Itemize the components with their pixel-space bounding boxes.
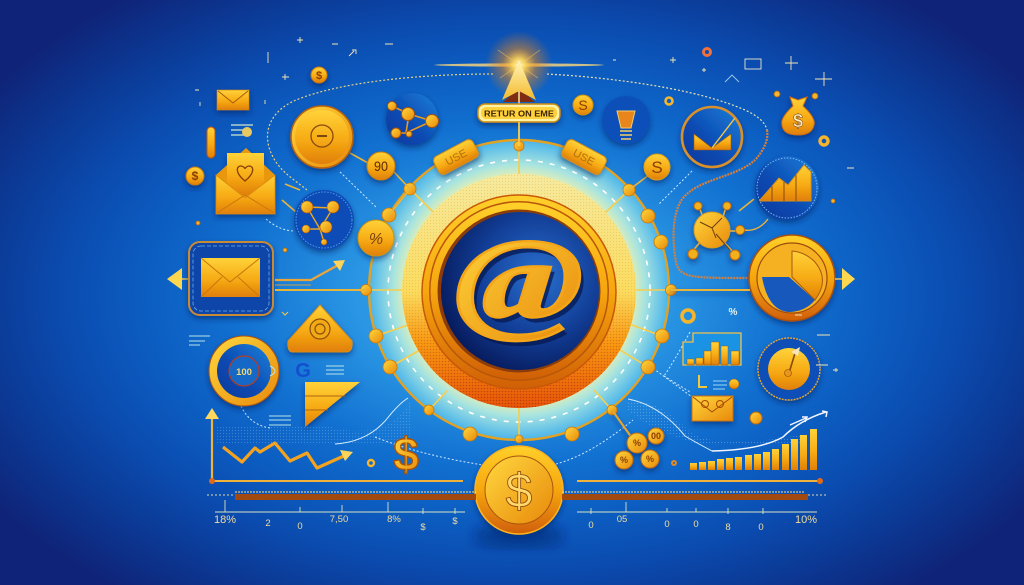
pill [207, 127, 215, 158]
label: return on email [478, 104, 560, 122]
orbit nodes [360, 141, 676, 443]
coin: dollar right: S [651, 158, 663, 177]
coin: percent glyphs [358, 220, 394, 256]
scale right: 0 [693, 519, 699, 530]
dial: 100: 100 [236, 367, 252, 378]
coin: dollar right [644, 154, 670, 180]
dashed inner orbit [388, 160, 650, 422]
coin: 90 [367, 152, 395, 180]
small rings [196, 48, 835, 466]
arrow tag left [167, 268, 188, 290]
money bag: $ [793, 111, 803, 131]
network badge top [386, 93, 438, 145]
scale left: $ [452, 516, 458, 527]
scale right: 0 [758, 522, 764, 533]
dot mesh waves [217, 402, 410, 445]
icon: envelope with heart [216, 148, 275, 214]
at sign: @ [454, 215, 584, 344]
baseline bar right [562, 492, 826, 500]
USE badge left: USE [444, 147, 469, 168]
orange envelope [692, 396, 733, 421]
dial: 100 [209, 336, 279, 406]
chart badge [755, 156, 819, 220]
scale left: 2 [265, 518, 271, 529]
pie chart dial [671, 235, 835, 321]
decorative sparks [195, 37, 854, 372]
percent coins: % [620, 455, 628, 465]
email box [189, 242, 273, 315]
gold bezel [422, 195, 616, 389]
gold ledger triangle [305, 382, 360, 427]
chevron [282, 312, 288, 315]
bar chart right [690, 429, 817, 470]
knob dial [758, 338, 820, 400]
money bag [782, 97, 814, 135]
scale right: 05 [617, 514, 627, 525]
big gold button [291, 106, 353, 168]
percent label: % [729, 307, 738, 318]
outer orbit ring [369, 140, 669, 440]
check and list [699, 375, 739, 389]
blue glyph: G [295, 360, 311, 382]
halo ring [402, 174, 636, 408]
coin: dollar top left [311, 67, 327, 83]
coin: dollar right top [573, 95, 593, 115]
percent coins: % [646, 454, 654, 464]
small list icon [231, 125, 253, 137]
dotted connector curves [241, 74, 767, 465]
coin: dollar left: $ [192, 169, 199, 183]
USE badge left [432, 138, 480, 176]
envelope badge [682, 107, 742, 167]
scale left: 8% [387, 514, 401, 525]
scale right: 10% [795, 514, 817, 526]
coin: dollar right top: S [578, 97, 588, 113]
scale right [577, 502, 817, 533]
small icon lines [189, 336, 344, 425]
central disk with hub [368, 105, 671, 440]
scale right: 0 [664, 519, 670, 530]
scale right: 8 [725, 522, 731, 533]
coin: dollar top left: $ [316, 70, 322, 82]
at sign: @ [458, 220, 588, 349]
scale left: 0 [297, 521, 303, 532]
dollar sign glyph: $ [393, 428, 419, 480]
stem to ring [518, 122, 520, 146]
scale left: 18% [214, 514, 236, 526]
scale left: 7,50 [330, 514, 348, 525]
line chart left [205, 408, 463, 484]
arrow peak [502, 60, 536, 104]
icon: small envelope [217, 90, 249, 110]
coin: dollar left [186, 167, 204, 185]
link left [275, 289, 366, 291]
spokes [368, 105, 671, 440]
framed bar chart [683, 333, 741, 365]
dollar coin big [475, 446, 563, 547]
dollar coin big: $ [506, 465, 532, 518]
sunburst [434, 31, 604, 99]
percent coins: 00 [651, 431, 661, 441]
scale left: $ [420, 522, 426, 533]
short links [282, 153, 754, 215]
coin: 90: 90 [374, 158, 388, 174]
USE badge right: USE [571, 147, 596, 168]
label: return on email: RETUR ON EME [484, 109, 554, 119]
percent coins: % [633, 438, 641, 448]
arrow tag right [835, 268, 855, 290]
scale right: 0 [588, 520, 594, 531]
bulb badge [602, 96, 650, 144]
right axis [577, 478, 823, 484]
percent coins [612, 410, 664, 469]
inner navy well [441, 212, 599, 370]
split network icon [688, 202, 768, 260]
USE badge right [560, 138, 608, 176]
network badge left [294, 190, 354, 250]
coin: percent glyphs: % [369, 231, 383, 248]
connector arrow up [275, 260, 345, 285]
triangle badge [288, 305, 352, 352]
scale left [214, 500, 465, 533]
baseline bar left [207, 492, 476, 500]
envelope [201, 258, 260, 297]
rising arrows [712, 411, 827, 451]
small coin [750, 412, 762, 424]
